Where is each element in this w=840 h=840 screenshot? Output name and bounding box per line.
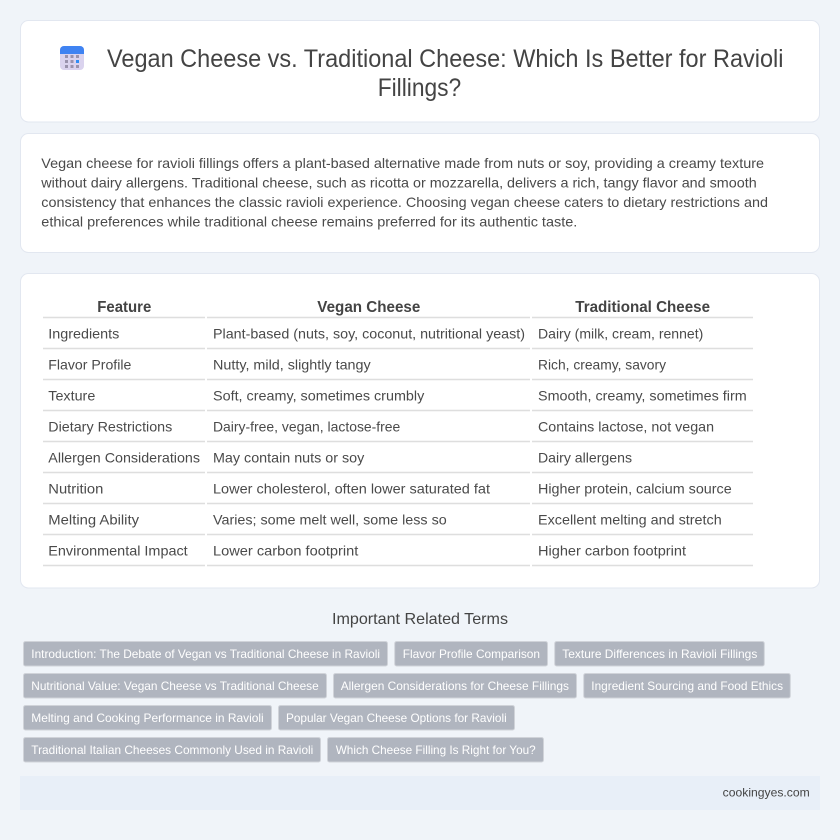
- table header: Traditional Cheese: [575, 299, 710, 316]
- panel: introduction: [20, 134, 820, 252]
- chip: [24, 674, 326, 698]
- chip: Nutritional Value: Vegan Cheese vs Traditional Cheese: [31, 679, 319, 693]
- text block: introduction: ethical preferences while traditional cheese remains preferred for its authentic taste.: [41, 213, 577, 229]
- chip: [24, 642, 388, 666]
- row: environmental impact: [48, 542, 686, 558]
- chip: [334, 674, 576, 698]
- row: melting ability: [48, 512, 722, 528]
- chip: Introduction: The Debate of Vegan vs Traditional Cheese in Ravioli: [31, 647, 380, 661]
- footer: [20, 776, 820, 810]
- table header: [97, 299, 710, 316]
- chip: [278, 706, 514, 730]
- row: allergen considerations: May contain nuts or soy: [213, 450, 364, 466]
- chip: [24, 738, 320, 762]
- text block: introduction: [40, 155, 768, 229]
- row: texture: Smooth, creamy, sometimes firm: [538, 388, 747, 404]
- row: flavor profile: Flavor Profile: [48, 356, 132, 372]
- chip: Ingredient Sourcing and Food Ethics: [591, 679, 783, 693]
- row: melting ability: Excellent melting and stretch: [538, 512, 722, 528]
- row: dietary restrictions: [48, 418, 714, 434]
- chip: Traditional Italian Cheeses Commonly Used in Ravioli: [31, 743, 313, 757]
- text block: introduction: consistency that enhances the classic ravioli experience. Choosing vegan cheese caters to dietary restrictions and: [41, 194, 768, 210]
- icon: calendar: [60, 46, 84, 70]
- chip: Which Cheese Filling Is Right for You?: [336, 743, 536, 757]
- chip: [584, 674, 790, 698]
- row: melting ability: Melting Ability: [48, 512, 139, 528]
- text block: introduction: without dairy allergens. Traditional cheese, such as ricotta or mozzarella, delivers a rich, tangy flavor and smooth: [40, 174, 757, 190]
- row: environmental impact: Environmental Impact: [48, 542, 188, 558]
- chip: [328, 738, 544, 762]
- row: ingredients: Dairy (milk, cream, rennet): [538, 326, 703, 342]
- heading: related terms: Important Related Terms: [332, 611, 508, 628]
- chip: Allergen Considerations for Cheese Fillings: [341, 679, 569, 693]
- panel: comparison table: [20, 274, 820, 588]
- row: ingredients: [48, 326, 703, 342]
- row: ingredients: Ingredients: [48, 326, 119, 342]
- table row lines: [43, 318, 753, 566]
- row: nutrition: [48, 480, 732, 496]
- row: ingredients: Plant-based (nuts, soy, coconut, nutritional yeast): [213, 326, 525, 342]
- footer: cookingyes.com: [723, 786, 810, 800]
- table header: Vegan Cheese: [317, 299, 420, 316]
- chip: [24, 706, 272, 730]
- row: nutrition: Nutrition: [48, 480, 103, 496]
- chip: Melting and Cooking Performance in Ravioli: [31, 711, 264, 725]
- title: Vegan Cheese vs. Traditional Cheese: Which Is Better for Ravioli: [107, 45, 784, 73]
- row: dietary restrictions: Contains lactose, not vegan: [538, 418, 714, 434]
- row: texture: Texture: [48, 388, 96, 404]
- row: nutrition: Higher protein, calcium source: [538, 480, 732, 496]
- chip: Texture Differences in Ravioli Fillings: [562, 647, 757, 661]
- chip: Flavor Profile Comparison: [403, 647, 540, 661]
- row: dietary restrictions: Dairy-free, vegan, lactose-free: [213, 418, 401, 434]
- chip: [395, 642, 548, 666]
- panel: header: [20, 20, 820, 122]
- row: melting ability: Varies; some melt well, some less so: [213, 512, 447, 528]
- row: texture: Soft, creamy, sometimes crumbly: [213, 388, 424, 404]
- row: allergen considerations: Allergen Considerations: [48, 450, 200, 466]
- title: [107, 45, 784, 102]
- row: environmental impact: Higher carbon footprint: [538, 542, 686, 558]
- row: environmental impact: Lower carbon footprint: [213, 542, 358, 558]
- row: texture: [48, 388, 747, 404]
- row: allergen considerations: Dairy allergens: [538, 450, 632, 466]
- row: flavor profile: Rich, creamy, savory: [538, 356, 666, 372]
- row: nutrition: Lower cholesterol, often lower saturated fat: [213, 480, 490, 496]
- chip: [555, 642, 764, 666]
- chip: Popular Vegan Cheese Options for Ravioli: [286, 711, 507, 725]
- row: flavor profile: [48, 356, 666, 372]
- text block: introduction: Vegan cheese for ravioli fillings offers a plant-based alternative made from nuts or soy, providing a creamy texture: [41, 155, 764, 171]
- row: allergen considerations: [48, 450, 632, 466]
- title: Fillings?: [378, 74, 461, 102]
- table header: Feature: [97, 299, 151, 316]
- row: dietary restrictions: Dietary Restrictions: [48, 418, 172, 434]
- row: flavor profile: Nutty, mild, slightly tangy: [213, 356, 371, 372]
- related term chips: [24, 642, 790, 762]
